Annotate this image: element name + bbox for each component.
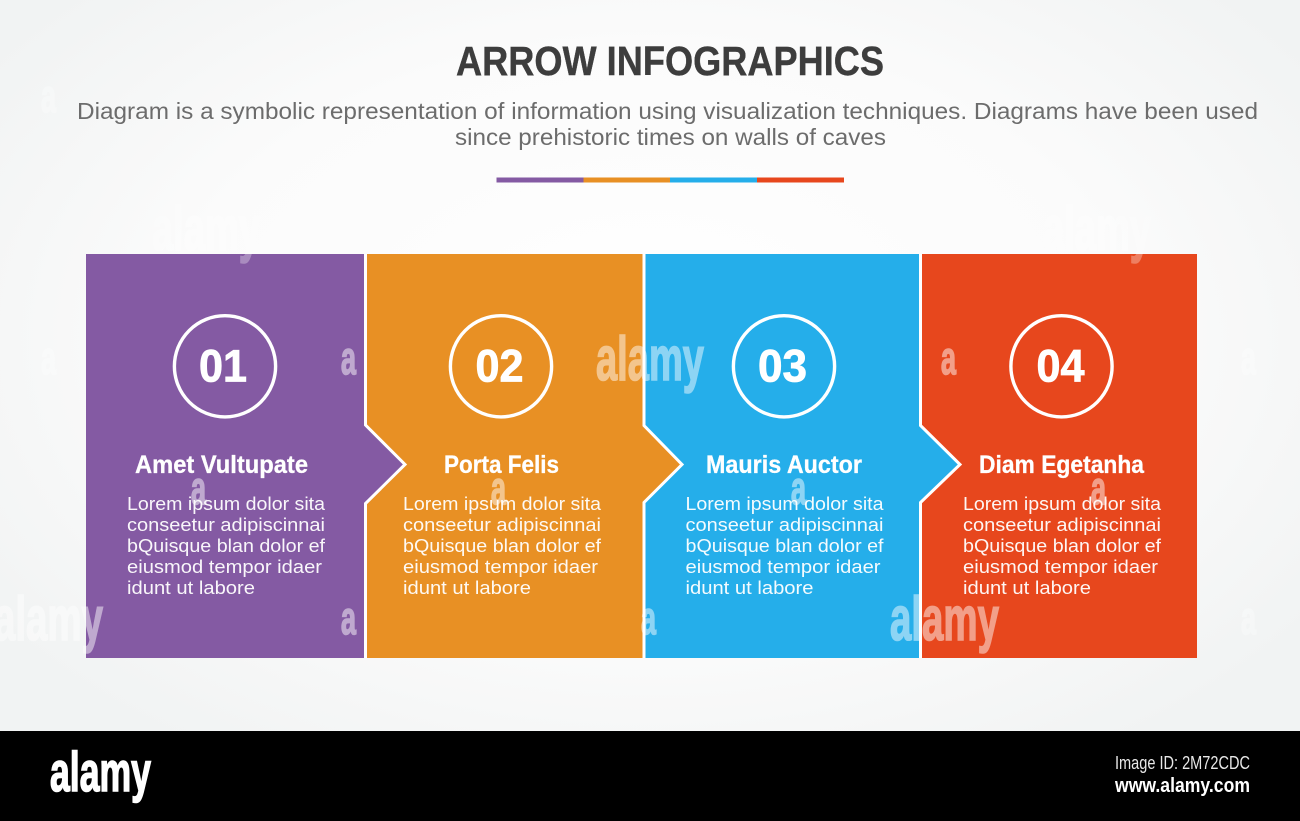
watermarks on background: alamy bbox=[152, 195, 260, 264]
body text: idunt ut labore bbox=[403, 577, 531, 598]
body text: conseetur adipiscinnai bbox=[403, 514, 601, 535]
watermarks on panels: a bbox=[341, 592, 356, 644]
panel: step 3 blue arrow bbox=[644, 254, 960, 658]
number circle 02 bbox=[450, 316, 552, 417]
number circle 03: 03 bbox=[758, 340, 807, 392]
number circle 03 bbox=[733, 316, 835, 417]
body text: Lorem ipsum dolor sita bbox=[963, 493, 1162, 514]
heading: Mauris Auctor bbox=[706, 451, 862, 479]
watermarks on background: alamy bbox=[1043, 195, 1151, 264]
heading: Porta Felis bbox=[444, 451, 559, 479]
body text: Lorem ipsum dolor sita bbox=[686, 493, 884, 514]
watermarks on panels: a bbox=[341, 332, 356, 384]
body text: bQuisque blan dolor ef bbox=[686, 535, 884, 556]
panel: step 4 red bbox=[921, 254, 1197, 658]
body text: Lorem ipsum dolor sita bbox=[127, 493, 326, 514]
heading: Amet Vultupate bbox=[135, 451, 308, 479]
watermarks on background: a bbox=[41, 70, 56, 122]
body text bbox=[403, 493, 602, 598]
body text: Lorem ipsum dolor sita bbox=[403, 493, 602, 514]
body text: conseetur adipiscinnai bbox=[963, 514, 1161, 535]
body text: eiusmod tempor idaer bbox=[686, 556, 880, 577]
watermarks on panels: a bbox=[791, 462, 806, 514]
panel: step 1 purple arrow bbox=[86, 254, 405, 658]
watermarks on panels: a bbox=[641, 592, 656, 644]
heading: Diam Egetanha bbox=[979, 451, 1145, 479]
body text bbox=[963, 493, 1162, 598]
panel: step 2 orange arrow bbox=[366, 254, 682, 658]
title: ARROW INFOGRAPHICS bbox=[456, 38, 884, 84]
watermarks on panels bbox=[0, 325, 1106, 654]
title divider: four colour bar bbox=[496, 178, 844, 182]
watermarks on background bbox=[41, 70, 1256, 644]
footer logo: alamy bbox=[50, 740, 151, 803]
body text: idunt ut labore bbox=[686, 577, 814, 598]
watermarks on background: a bbox=[41, 332, 56, 384]
image id: Image ID: 2M72CDC bbox=[1115, 753, 1250, 773]
watermarks on panels: alamy bbox=[596, 325, 704, 394]
subtitle text bbox=[77, 98, 1258, 150]
number circle 02: 02 bbox=[476, 340, 524, 392]
website: www.alamy.com bbox=[1114, 775, 1250, 797]
body text bbox=[127, 493, 326, 598]
body text: conseetur adipiscinnai bbox=[127, 514, 325, 535]
body text: bQuisque blan dolor ef bbox=[403, 535, 602, 556]
arrow separators bbox=[366, 254, 960, 658]
watermarks on panels: a bbox=[941, 332, 956, 384]
body text bbox=[686, 493, 884, 598]
watermarks on background: a bbox=[1241, 592, 1256, 644]
footer bar bbox=[0, 731, 1300, 821]
body text: eiusmod tempor idaer bbox=[127, 556, 322, 577]
body text: bQuisque blan dolor ef bbox=[963, 535, 1162, 556]
number circle 01: 01 bbox=[199, 340, 247, 392]
watermarks on background: a bbox=[1241, 332, 1256, 384]
number circle 04: 04 bbox=[1036, 340, 1084, 392]
watermarks on panels: a bbox=[491, 462, 506, 514]
number circle 01 bbox=[174, 316, 276, 417]
body text: idunt ut labore bbox=[127, 577, 255, 598]
body text: conseetur adipiscinnai bbox=[686, 514, 884, 535]
body text: eiusmod tempor idaer bbox=[963, 556, 1158, 577]
watermarks on panels: a bbox=[1091, 462, 1106, 514]
body text: idunt ut labore bbox=[963, 577, 1091, 598]
watermarks on panels: alamy bbox=[890, 585, 999, 654]
body text: eiusmod tempor idaer bbox=[403, 556, 598, 577]
watermarks on panels: a bbox=[191, 462, 206, 514]
subtitle text: since prehistoric times on walls of caves bbox=[455, 124, 886, 150]
subtitle text: Diagram is a symbolic representation of information using visualization techniques. Diagrams have been used bbox=[77, 98, 1258, 124]
body text: bQuisque blan dolor ef bbox=[127, 535, 326, 556]
number circle 04 bbox=[1011, 316, 1112, 417]
